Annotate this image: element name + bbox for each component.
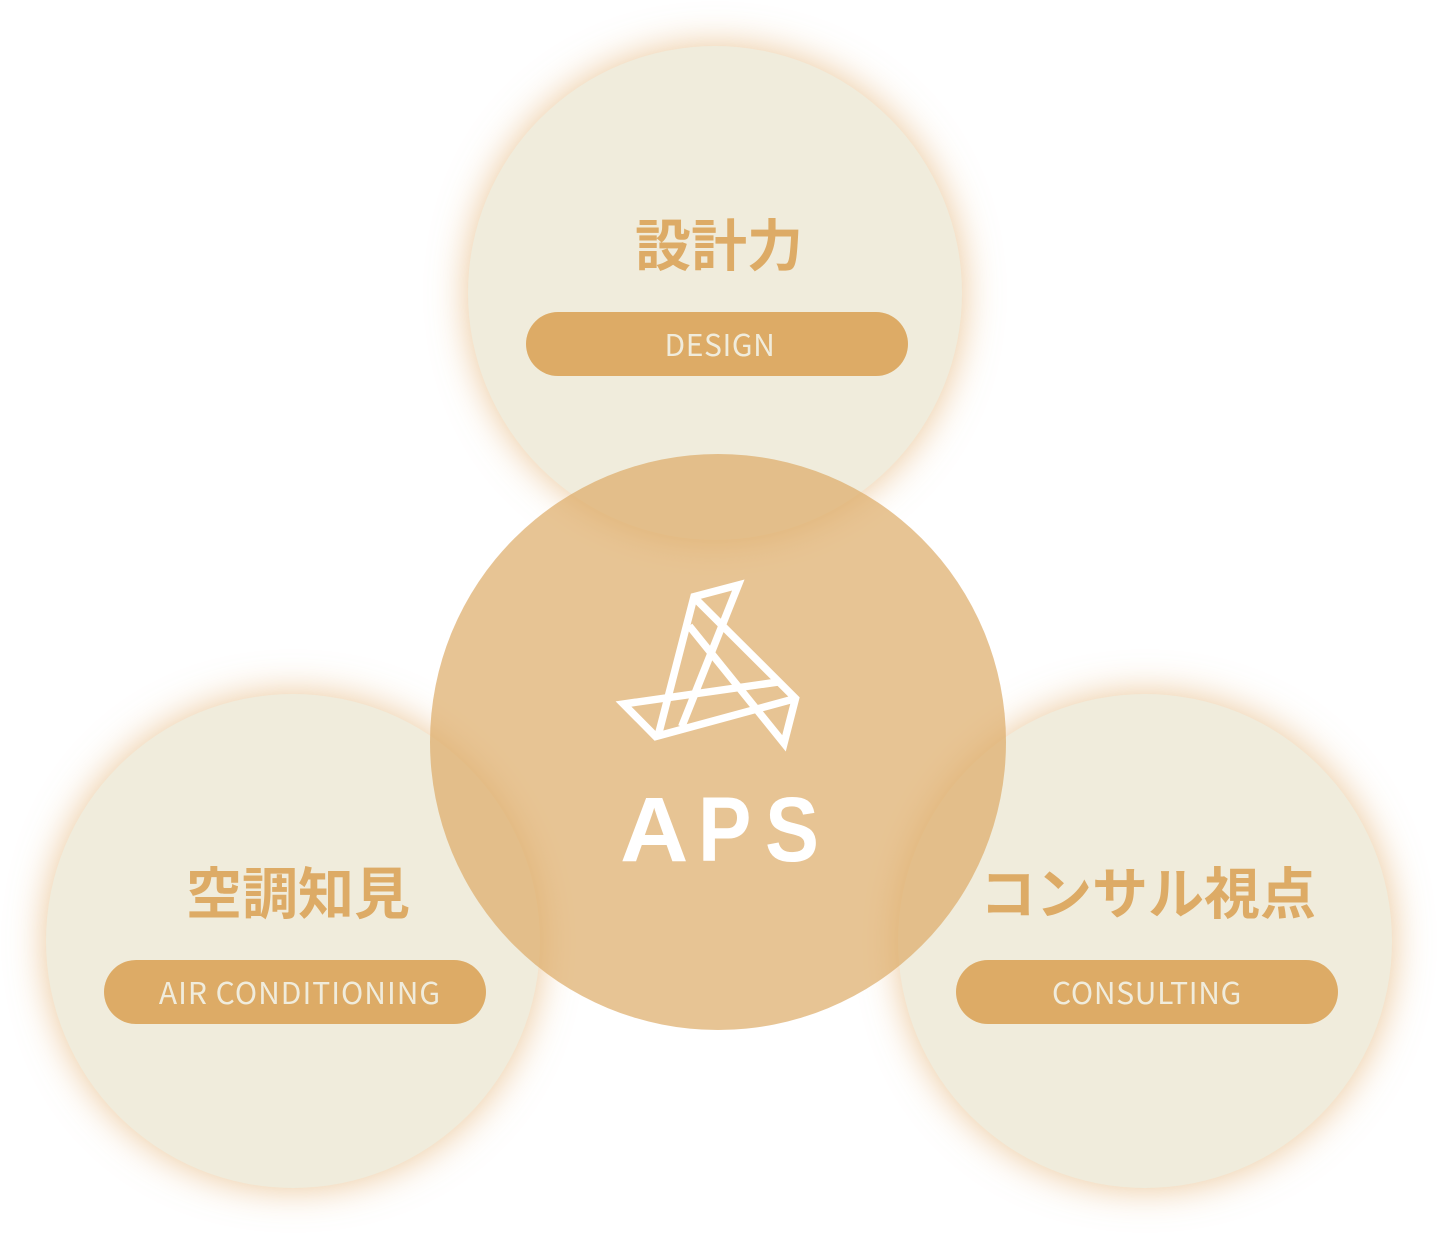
label pill: air conditioning <box>104 960 486 1024</box>
icon: APS logo mark <box>616 580 800 752</box>
logo wordmark <box>620 779 819 881</box>
label pill: design: DESIGN <box>665 321 775 365</box>
logo wordmark: P <box>698 779 751 881</box>
label pill: consulting: CONSULTING <box>1052 969 1242 1013</box>
heading: design: 設計力 <box>635 202 803 283</box>
panel: air conditioning circle <box>46 694 540 1188</box>
panel: central APS circle <box>430 454 1006 1030</box>
heading: consulting: コンサル視点 <box>980 850 1316 931</box>
label pill: air conditioning: AIR CONDITIONING <box>159 969 441 1013</box>
label pill: consulting <box>956 960 1338 1024</box>
panel: consulting circle <box>898 694 1392 1188</box>
panel: design circle <box>468 46 962 540</box>
logo wordmark: S <box>765 779 819 881</box>
heading: air conditioning: 空調知見 <box>186 850 410 931</box>
logo wordmark: A <box>620 779 688 881</box>
label pill: design <box>526 312 908 376</box>
